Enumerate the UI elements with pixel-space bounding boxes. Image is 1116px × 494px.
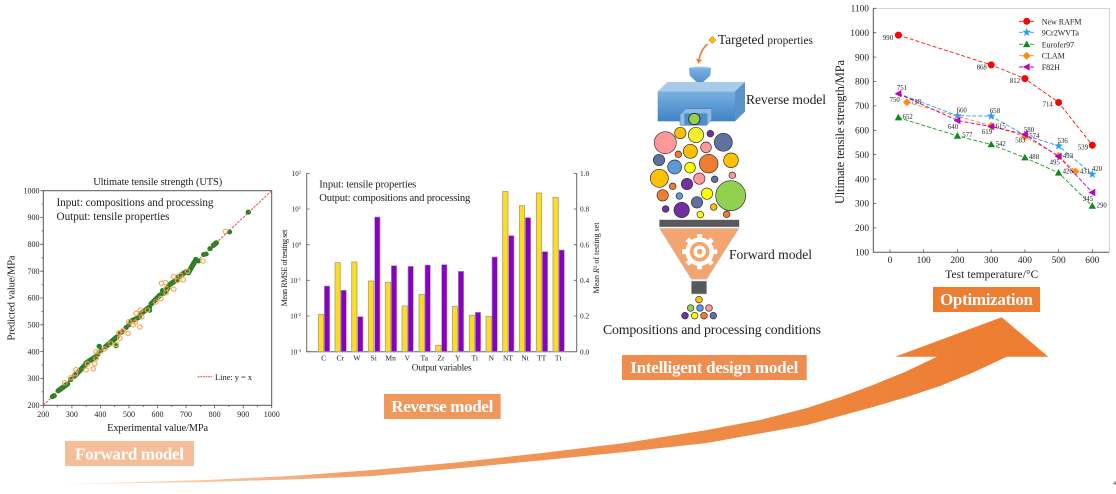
growth arrow (57, 317, 1048, 484)
left axis labels: 10 (292, 241, 299, 249)
data value labels: 580 (1024, 127, 1035, 134)
forward model hopper (659, 220, 739, 294)
legend: CLAM (1042, 52, 1065, 61)
legend: New RAFM (1042, 17, 1081, 26)
x axis tick labels: 300 (66, 410, 78, 419)
right axis labels (580, 169, 590, 356)
x axis tick labels: 900 (237, 410, 249, 419)
y axis tick labels: 700 (28, 267, 40, 276)
pile of material circles (650, 127, 746, 218)
right axis labels: 0.4 (580, 276, 590, 285)
y axis tick labels: 1000 (24, 186, 40, 195)
data value labels: 536 (1058, 138, 1068, 145)
data value labels: 660 (957, 108, 967, 114)
right y axis title: Mean R (592, 268, 601, 294)
x axis tick labels: 800 (209, 410, 221, 419)
x axis tick labels: 300 (984, 256, 999, 266)
input and output note (56, 197, 214, 223)
x axis tick labels: 600 (152, 410, 164, 419)
left axis labels: 10 (290, 348, 297, 356)
right y axis title: 2 (594, 265, 599, 268)
data value labels: 542 (996, 141, 1006, 148)
right axis labels: 1.0 (580, 169, 590, 178)
left axis labels: 10 (290, 277, 297, 285)
data value labels: 574 (1029, 133, 1040, 140)
legend (198, 373, 253, 382)
right axis labels: 0.0 (580, 347, 590, 356)
x axis title: Test temperature/°C (945, 269, 1038, 281)
data value labels: 751 (897, 85, 907, 92)
plot frame (873, 8, 1109, 252)
data value labels: 577 (962, 132, 973, 139)
data value labels: 812 (1010, 78, 1021, 85)
category labels: Si (371, 354, 377, 362)
y axis tick labels: 300 (28, 374, 40, 383)
right y axis title: of testing set (592, 222, 601, 266)
x axis tick labels: 600 (1085, 256, 1100, 266)
page number: 4 (1113, 481, 1116, 487)
category labels: Nt (521, 354, 530, 362)
purple R squared bars (324, 217, 564, 352)
data value labels: 640 (948, 124, 959, 131)
series: Eurofer97 (895, 114, 1096, 209)
y axis tick labels: 700 (855, 102, 869, 112)
data value labels: 718 (911, 99, 922, 106)
y axis tick labels: 400 (855, 175, 869, 185)
category labels: Ti (471, 354, 478, 362)
category labels: W (353, 354, 361, 362)
green training points (52, 212, 248, 397)
axis ticks (40, 191, 272, 408)
category labels: Mn (385, 354, 396, 362)
y axis tick labels: 200 (28, 401, 40, 410)
y axis tick labels: 500 (855, 151, 869, 161)
category labels: C (321, 354, 326, 362)
compositions and processing caption: Compositions and processing conditions (603, 322, 821, 337)
left axis labels: -1 (297, 276, 301, 282)
category labels: N (489, 354, 495, 362)
data value labels: 868 (977, 64, 987, 72)
y axis tick labels: 300 (855, 200, 869, 210)
data value labels: 750 (890, 97, 900, 104)
top and right frame (873, 8, 1109, 252)
orange testing points (62, 229, 228, 385)
reference line y = x (43, 191, 272, 405)
y axis tick labels: 600 (28, 294, 40, 303)
x axis tick labels: 100 (917, 256, 931, 266)
right axis labels: 0.8 (580, 205, 590, 214)
yellow RMSE bars (318, 191, 558, 352)
legend: Line: y = x (215, 373, 253, 382)
label: optimization: Optimization (940, 290, 1034, 309)
left axis labels: -3 (297, 348, 302, 353)
output circles (682, 296, 717, 319)
plot frame (307, 173, 577, 352)
scatter data points (52, 212, 248, 397)
input and output note (319, 180, 471, 204)
category labels: V (405, 354, 411, 362)
series: 9Cr2WVTa (898, 94, 1097, 178)
reverse model machine (658, 82, 745, 125)
legend (1019, 17, 1081, 72)
data value labels: 619 (982, 129, 993, 136)
x axis tick labels: 200 (950, 256, 965, 266)
data value labels (883, 35, 1107, 210)
y axis tick labels (850, 4, 869, 258)
data value labels: 488 (1029, 154, 1040, 161)
y axis tick labels: 1100 (851, 4, 869, 14)
data value labels: 345 (1083, 196, 1094, 203)
category labels: Zr (437, 354, 445, 362)
x axis tick labels: 500 (1052, 256, 1066, 266)
y axis tick labels: 100 (855, 248, 869, 258)
paired bars (318, 191, 564, 352)
input and output note: Input: compositions and processing (56, 197, 214, 209)
axis ticks (307, 173, 577, 352)
panel: forward model scatter chart (6, 177, 280, 434)
data value labels: 431 (1080, 168, 1090, 176)
data value labels: 426 (1063, 168, 1073, 176)
category labels (321, 354, 563, 362)
plot frame (43, 191, 272, 405)
panel: intelligent design model diagram (603, 32, 826, 337)
data value labels: 493 (1063, 153, 1074, 160)
x axis tick labels (37, 410, 280, 419)
label: forward model (65, 441, 194, 466)
x axis tick labels: 700 (180, 410, 192, 419)
left axis labels: -2 (297, 312, 301, 317)
left axis labels: 1 (299, 205, 301, 210)
category labels: Y (455, 354, 461, 362)
axis ticks (873, 8, 1092, 252)
series: New RAFM (895, 32, 1096, 149)
x axis tick labels: 400 (1018, 256, 1032, 266)
x axis tick labels: 400 (94, 410, 106, 419)
series: CLAM (903, 98, 1080, 176)
data value labels: 290 (1097, 202, 1107, 210)
category labels: Tt (555, 354, 563, 362)
y axis tick labels: 400 (28, 347, 40, 356)
forward model caption: Forward model (729, 247, 812, 262)
y axis tick labels: 900 (855, 53, 869, 63)
y axis tick labels: 500 (28, 320, 40, 330)
x axis tick labels: 1000 (264, 410, 280, 419)
targeted properties caption: Targeted properties (718, 32, 814, 47)
x axis tick labels: 500 (123, 410, 135, 419)
x axis tick labels: 0 (888, 256, 893, 266)
x axis tick labels: 200 (37, 410, 49, 419)
y axis title: Ultimate tensile strength/MPa (833, 60, 847, 204)
x axis tick labels (888, 256, 1100, 266)
x axis title: Output variables (412, 364, 472, 374)
input and output note: Input: tensile properties (319, 180, 416, 191)
left axis labels (290, 170, 302, 356)
y axis tick labels: 200 (855, 224, 869, 234)
icon: inlet funnel (689, 67, 711, 88)
icon: gear (684, 236, 715, 267)
label: reverse model (384, 394, 501, 419)
panel: reverse model bar chart (280, 169, 601, 374)
label: intelligent design model: Intelligent design model (630, 358, 799, 377)
chart title: Ultimate tensile strength (UTS) (93, 177, 222, 188)
input and output note: Output: tensile properties (56, 211, 170, 223)
data value labels: 495 (1050, 160, 1060, 166)
category labels: Cr (337, 354, 345, 362)
label: reverse model: Reverse model (391, 397, 494, 416)
y axis tick labels: 800 (855, 78, 869, 88)
y axis tick labels: 1000 (850, 29, 869, 39)
category labels: TT (537, 354, 547, 362)
data value labels: 583 (1015, 138, 1026, 144)
category labels: Ta (421, 354, 429, 362)
panel: optimization line chart (833, 4, 1109, 281)
y axis tick labels: 600 (855, 126, 869, 136)
data value labels: 420 (1092, 166, 1103, 173)
y axis tick labels (24, 186, 40, 410)
left axis labels: 0 (299, 241, 302, 246)
left axis labels: 10 (290, 313, 297, 321)
label: intelligent design model (622, 355, 807, 380)
data value labels: 714 (1043, 102, 1053, 108)
category labels: NT (503, 354, 513, 362)
right axis labels: 0.2 (580, 312, 590, 321)
input and output note: Output: compositions and processing (319, 193, 471, 204)
series: F82H (895, 90, 1095, 196)
left y axis title: Mean RMSE of testing set (280, 229, 289, 306)
icon: diamond bullet (709, 36, 716, 44)
icon: input arrow (699, 44, 708, 61)
right axis labels: 0.6 (580, 240, 590, 249)
left axis labels: 2 (299, 170, 301, 174)
data value labels: 990 (883, 35, 894, 42)
data value labels: 615 (996, 124, 1006, 130)
label: optimization (933, 287, 1040, 312)
legend: 9Cr2WVTa (1042, 28, 1079, 37)
reverse model caption: Reverse model (746, 92, 826, 107)
left axis labels: 10 (292, 206, 299, 214)
y axis title: Predicted value/MPa (6, 255, 18, 340)
icon: arrow head (696, 59, 702, 64)
y axis tick labels: 800 (28, 240, 40, 249)
y axis tick labels: 900 (28, 213, 40, 222)
diagram artwork (650, 36, 746, 319)
data value labels: 652 (903, 114, 913, 121)
left axis labels: 10 (292, 170, 299, 178)
x axis title: Experimental value/MPa (107, 423, 208, 434)
label: forward model: Forward model (75, 444, 184, 463)
data value labels: 658 (990, 108, 1001, 115)
legend: F82H (1042, 63, 1060, 72)
legend: Eurofer97 (1042, 40, 1074, 49)
data value labels: 539 (1078, 144, 1089, 152)
